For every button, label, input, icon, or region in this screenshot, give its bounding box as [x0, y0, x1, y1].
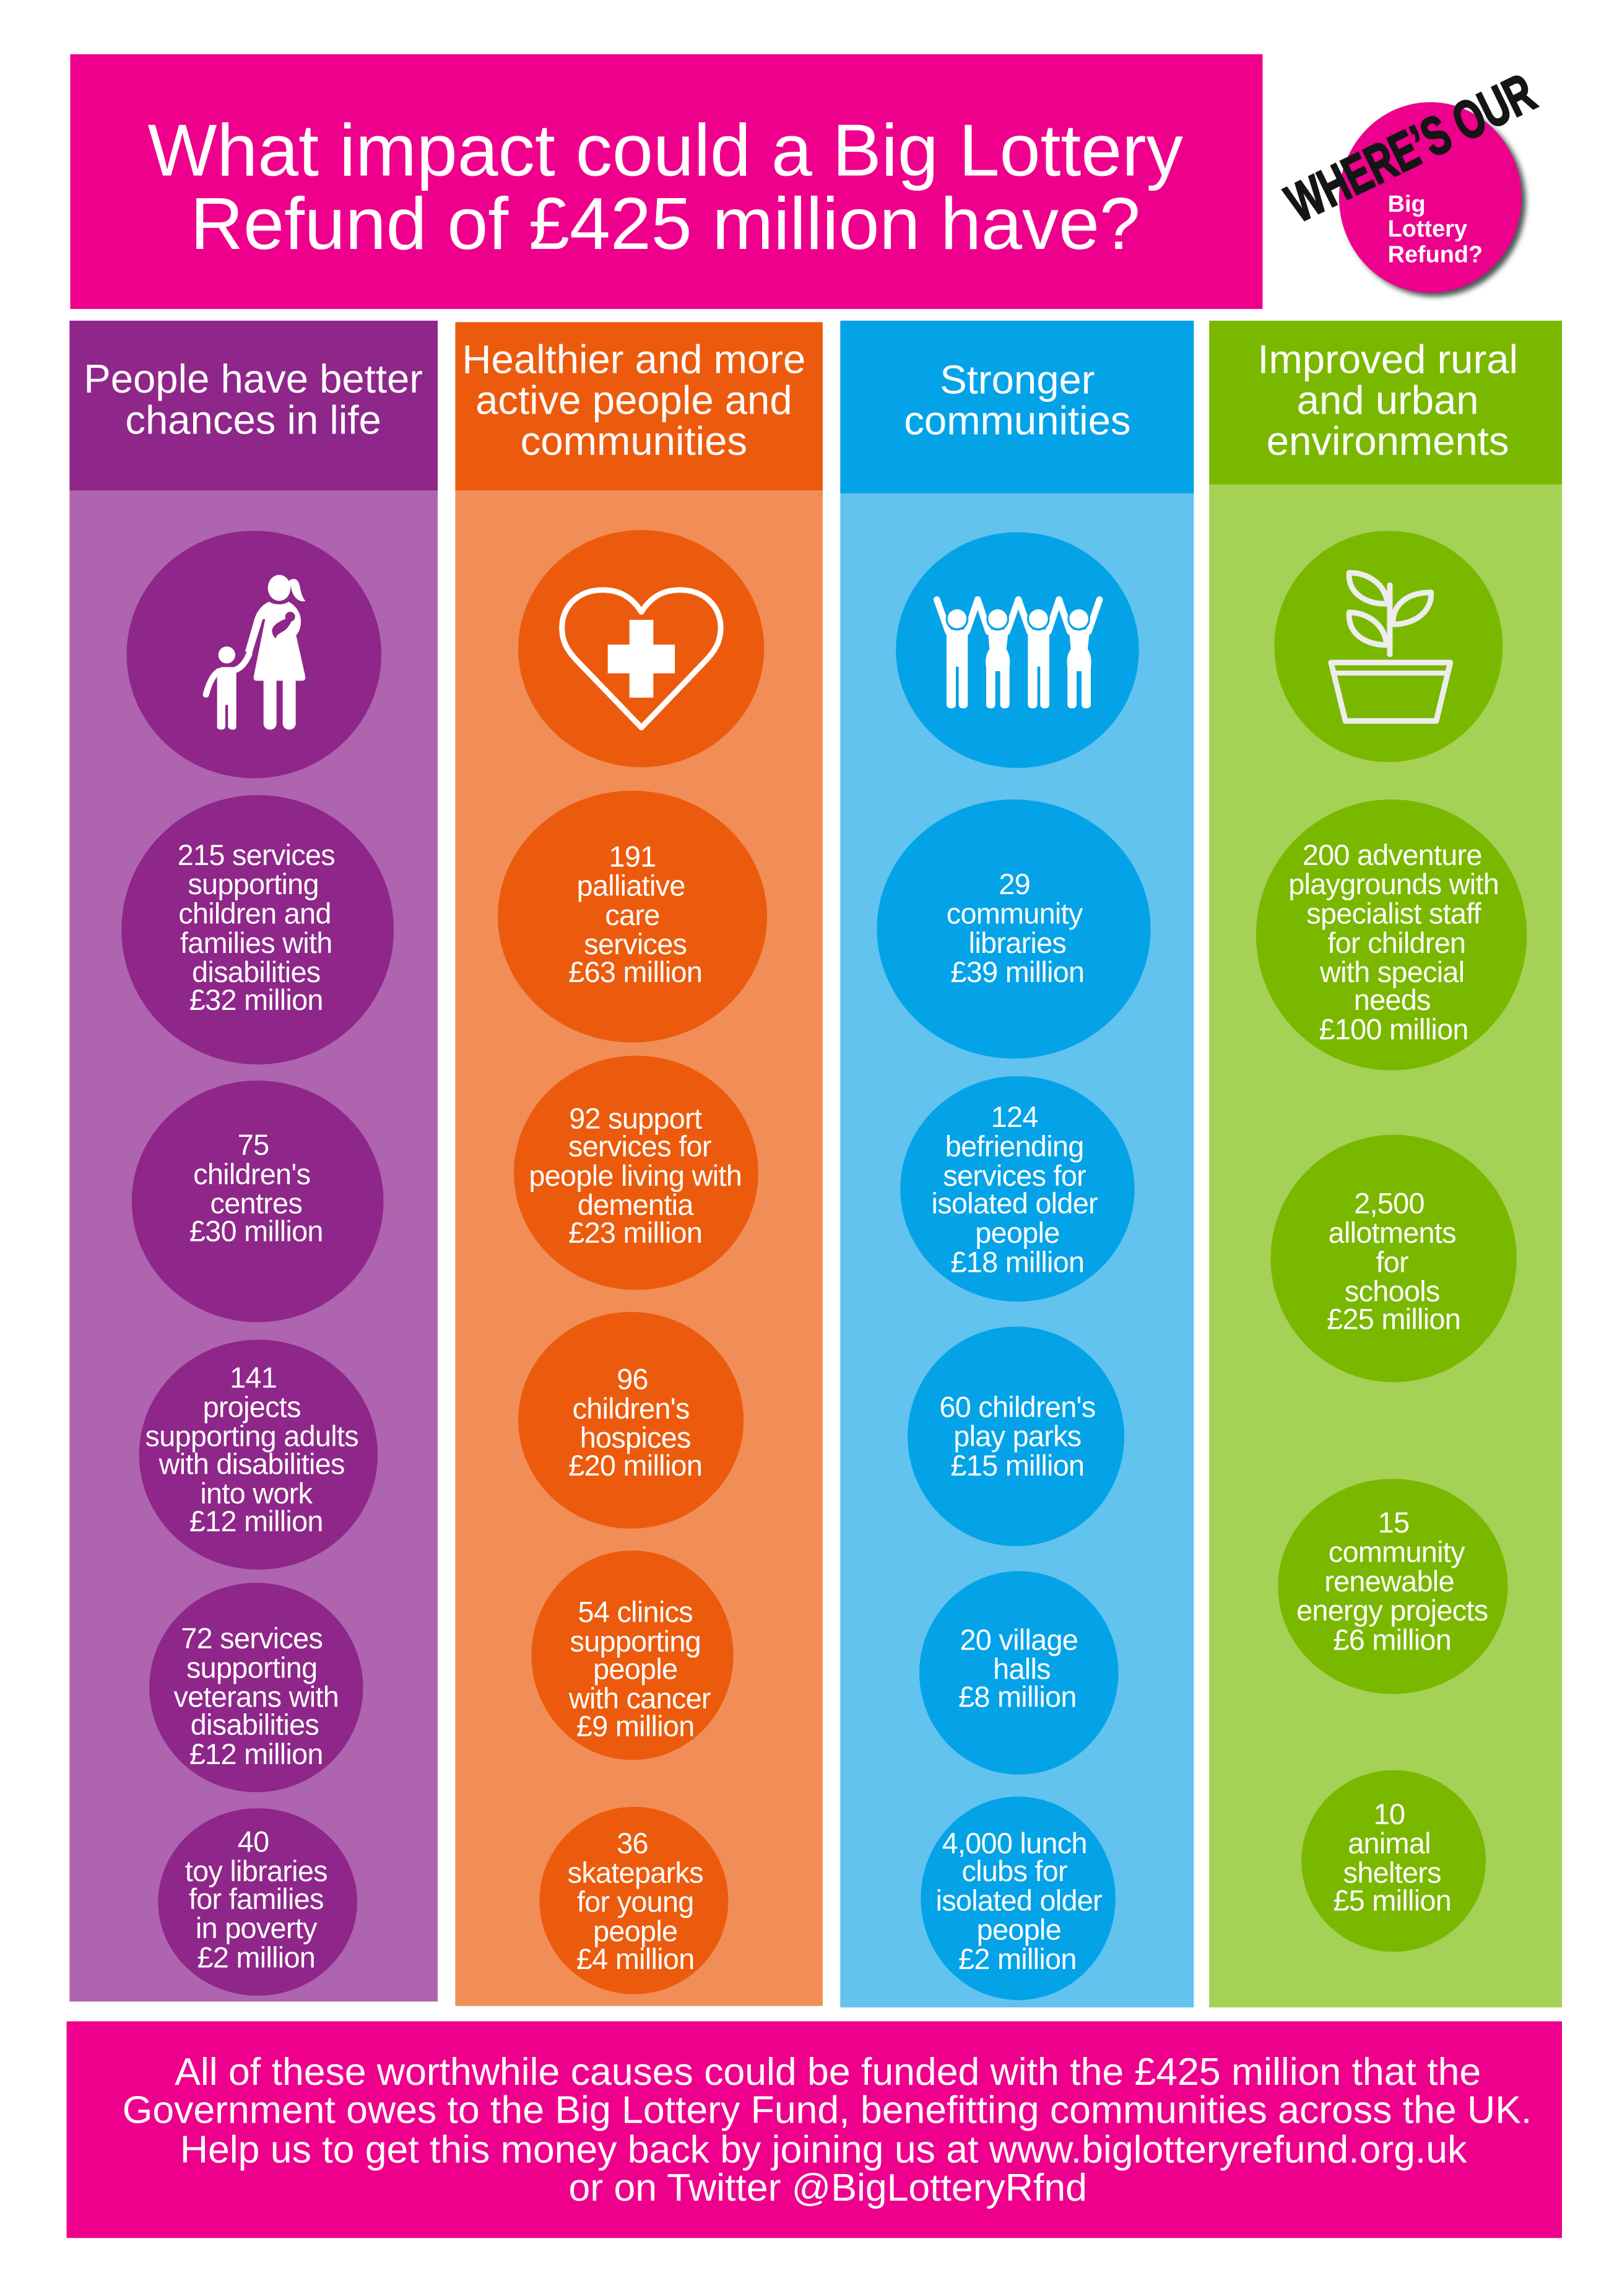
circle: 141 projects: 141 — [230, 1362, 277, 1394]
circle: 141 projects — [139, 1340, 378, 1570]
circle: 40 toy libraries: toy libraries — [185, 1855, 327, 1887]
panel background — [840, 494, 1194, 2007]
circle: 191 palliative care: 191 — [609, 840, 656, 872]
circle: 200 adventure playgrounds: for children — [1327, 927, 1465, 959]
circle: 215 services: disabilities — [192, 956, 320, 988]
icon: four people holding hands up — [896, 533, 1139, 768]
circle: 92 support services: people living with — [529, 1160, 742, 1192]
circle: 15 renewable energy projects: energy projects — [1296, 1594, 1488, 1627]
circle: 4,000 lunch clubs: isolated older — [936, 1884, 1102, 1916]
circle: 72 services: veterans with — [174, 1681, 339, 1713]
footer call to action: Government owes to the Big Lottery Fund, benefitting communities across the UK. — [123, 2088, 1532, 2131]
title banner — [71, 54, 1262, 309]
logo: Where's our Big Lottery Refund: Refund? — [1388, 241, 1483, 267]
circle: 200 adventure playgrounds: playgrounds with — [1288, 868, 1499, 900]
circle: 36 skateparks — [539, 1807, 728, 1994]
circle: 54 clinics: £9 million — [576, 1710, 695, 1742]
panel: healthier and more active people — [455, 322, 823, 2006]
circle: 2,500 allotments: schools — [1345, 1276, 1440, 1308]
icon: plant in pot — [1274, 531, 1503, 762]
circle: 92 support services — [514, 1056, 758, 1290]
circle: 54 clinics: supporting — [570, 1625, 701, 1658]
circle: 40 toy libraries: for families — [189, 1883, 324, 1915]
circle: 141 projects: into work — [200, 1477, 313, 1510]
circle: 96 children's hospices: hospices — [580, 1422, 691, 1454]
circle: 72 services: 72 services — [181, 1622, 323, 1655]
circle: 40 toy libraries — [158, 1808, 357, 1996]
circle: 29 community libraries: £39 million — [950, 956, 1084, 988]
circle: 36 skateparks: £4 million — [576, 1943, 695, 1975]
circle: 141 projects: £12 million — [189, 1505, 323, 1537]
circle: 200 adventure playgrounds: specialist staff — [1306, 898, 1482, 930]
circle: 54 clinics: 54 clinics — [578, 1596, 693, 1628]
circle: 60 children's play parks: 60 children's — [939, 1391, 1095, 1423]
circle: 215 services: children and — [178, 898, 331, 930]
icon: heart with cross — [518, 530, 764, 767]
circle: 54 clinics: with cancer — [568, 1682, 711, 1715]
circle: 191 palliative care — [498, 791, 767, 1043]
heading: improved environments: and urban — [1297, 378, 1479, 423]
circle: 36 skateparks: people — [593, 1915, 677, 1947]
logo: Where's our Big Lottery Refund: Lottery — [1388, 216, 1467, 242]
circle: 191 palliative care: £63 million — [568, 956, 702, 988]
footer call to action: or on Twitter @BigLotteryRfnd — [568, 2166, 1087, 2209]
circle: 124 befriending services: 124 — [991, 1101, 1038, 1133]
circle: 124 befriending services: isolated older — [931, 1188, 1098, 1220]
circle: 191 palliative care: palliative — [577, 870, 685, 902]
panel background — [69, 490, 438, 2001]
circle: 40 toy libraries: in poverty — [196, 1912, 318, 1944]
circle: 10 animal shelters: £5 million — [1333, 1884, 1451, 1916]
circle: 54 clinics: people — [593, 1653, 677, 1685]
panel background — [1209, 485, 1562, 2007]
circle: 92 support services: services for — [568, 1131, 711, 1163]
circle: 15 renewable energy projects: £6 million — [1333, 1624, 1451, 1656]
circle: 92 support services: dementia — [578, 1189, 694, 1221]
circle: 36 skateparks: for young — [577, 1886, 694, 1918]
heading: stronger communities: Stronger — [940, 357, 1095, 402]
circle: 141 projects: supporting adults — [145, 1420, 358, 1453]
circle: 75 children's centres: 75 — [238, 1129, 269, 1161]
circle: 10 animal shelters: shelters — [1343, 1856, 1441, 1889]
circle: 96 children's hospices: 96 — [617, 1363, 648, 1395]
circle: 2,500 allotments: allotments — [1329, 1217, 1456, 1249]
footer call to action: All of these worthwhile causes could be funded with the £425 million that the — [175, 2050, 1481, 2094]
footer call to action: Help us to get this money back by joining us at www.biglotteryrefund.org.uk — [180, 2128, 1467, 2171]
circle: 20 village halls — [919, 1571, 1119, 1775]
circle: 141 projects: with disabilities — [158, 1448, 345, 1481]
circle: 2,500 allotments: £25 million — [1327, 1303, 1460, 1336]
icon: mother with baby and child — [127, 531, 381, 778]
panel: improved rural and urban environments — [1209, 321, 1562, 2007]
circle: 15 renewable energy projects — [1278, 1479, 1508, 1694]
circle: 200 adventure playgrounds: £100 million — [1319, 1013, 1468, 1045]
logo: Where's our Big Lottery Refund — [1277, 62, 1544, 297]
circle: 20 village halls: halls — [993, 1653, 1051, 1685]
circle: 200 adventure playgrounds: with special — [1319, 956, 1464, 988]
circle: 40 toy libraries: £2 million — [197, 1942, 315, 1974]
circle: 191 palliative care: care — [605, 899, 660, 931]
circle: 10 animal shelters — [1301, 1770, 1486, 1952]
logo: Where's our Big Lottery Refund: Big — [1388, 191, 1426, 217]
circle: 75 children's centres: children's — [193, 1158, 310, 1190]
circle: 124 befriending services: services for — [943, 1160, 1086, 1192]
circle: 215 services — [121, 795, 394, 1064]
circle: 2,500 allotments: 2,500 — [1354, 1188, 1425, 1220]
circle: 72 services: supporting — [186, 1651, 317, 1684]
circle: 60 children's play parks — [908, 1326, 1124, 1546]
panel background — [455, 490, 823, 2006]
circle: 4,000 lunch clubs: 4,000 lunch — [942, 1827, 1087, 1859]
circle: 92 support services: 92 support — [569, 1103, 702, 1135]
circle: 29 community libraries: 29 — [999, 868, 1030, 900]
heading: people: People have better — [84, 356, 423, 401]
heading: improved environments: environments — [1267, 419, 1509, 464]
title banner: What impact could a Big Lottery — [148, 110, 1183, 192]
circle: 124 befriending services — [900, 1076, 1135, 1302]
circle: 72 services: disabilities — [191, 1709, 319, 1741]
circle: 92 support services: £23 million — [568, 1217, 702, 1249]
circle: 4,000 lunch clubs: people — [977, 1914, 1061, 1946]
heading: people — [69, 321, 438, 490]
circle: 75 children's centres: centres — [210, 1188, 302, 1220]
footer call to action — [67, 2021, 1562, 2238]
circle: 124 befriending services: people — [975, 1217, 1060, 1249]
heading: stronger communities: communities — [904, 398, 1131, 443]
circle: 54 clinics — [531, 1550, 734, 1760]
circle: 36 skateparks: skateparks — [568, 1856, 703, 1889]
circle: 10 animal shelters: 10 — [1374, 1798, 1405, 1830]
circle: 4,000 lunch clubs — [921, 1796, 1116, 2000]
circle: 29 community libraries: libraries — [969, 927, 1066, 959]
heading: healthier: active people and — [475, 378, 792, 423]
circle: 15 renewable energy projects: 15 — [1378, 1507, 1409, 1539]
circle: 75 children's centres: £30 million — [189, 1215, 323, 1248]
circle: 60 children's play parks: play parks — [953, 1420, 1082, 1453]
circle: 141 projects: projects — [203, 1391, 301, 1423]
circle: 96 children's hospices: children's — [573, 1393, 690, 1425]
heading: improved environments — [1209, 321, 1562, 485]
circle: 20 village halls: 20 village — [960, 1624, 1078, 1656]
circle: 15 renewable energy projects: community — [1329, 1536, 1465, 1568]
circle: 60 children's play parks: £15 million — [950, 1450, 1084, 1482]
panel: stronger communities — [840, 321, 1194, 2007]
circle: 96 children's hospices: £20 million — [568, 1450, 702, 1482]
circle: 75 children's centres — [132, 1081, 384, 1322]
circle: 20 village halls: £8 million — [958, 1681, 1077, 1713]
circle: 200 adventure playgrounds — [1256, 799, 1527, 1071]
circle: 29 community libraries: community — [947, 898, 1083, 930]
circle: 40 toy libraries: 40 — [238, 1826, 269, 1858]
circle: 215 services: 215 services — [178, 839, 335, 871]
panel: people have better chances in life — [69, 321, 438, 2001]
circle: 215 services: families with — [180, 927, 332, 959]
circle: 124 befriending services: £18 million — [950, 1246, 1084, 1278]
circle: 4,000 lunch clubs: clubs for — [961, 1855, 1067, 1887]
circle: 10 animal shelters: animal — [1348, 1827, 1431, 1859]
circle: 191 palliative care: services — [584, 928, 687, 960]
circle: 15 renewable energy projects: renewable — [1324, 1565, 1454, 1598]
circle: 29 community libraries — [877, 799, 1151, 1059]
circle: 96 children's hospices — [518, 1312, 744, 1529]
circle: 72 services — [149, 1583, 363, 1792]
circle: 36 skateparks: 36 — [617, 1827, 648, 1859]
heading: improved environments: Improved rural — [1257, 336, 1518, 381]
circle: 2,500 allotments — [1270, 1135, 1517, 1382]
circle: 215 services: supporting — [188, 868, 319, 900]
circle: 215 services: £32 million — [189, 984, 323, 1016]
circle: 200 adventure playgrounds: 200 adventure — [1303, 839, 1482, 871]
heading: healthier: communities — [521, 419, 747, 464]
title banner: Refund of £425 million have? — [191, 183, 1140, 265]
circle: 200 adventure playgrounds: needs — [1354, 984, 1431, 1016]
circle: 4,000 lunch clubs: £2 million — [958, 1943, 1077, 1975]
circle: 124 befriending services: befriending — [945, 1131, 1084, 1163]
heading: healthier — [455, 322, 823, 490]
circle: 2,500 allotments: for — [1376, 1246, 1408, 1278]
heading: healthier: Healthier and more — [462, 336, 805, 381]
circle: 72 services: £12 million — [189, 1738, 323, 1770]
heading: stronger communities — [840, 321, 1194, 494]
heading: people: chances in life — [125, 397, 381, 442]
